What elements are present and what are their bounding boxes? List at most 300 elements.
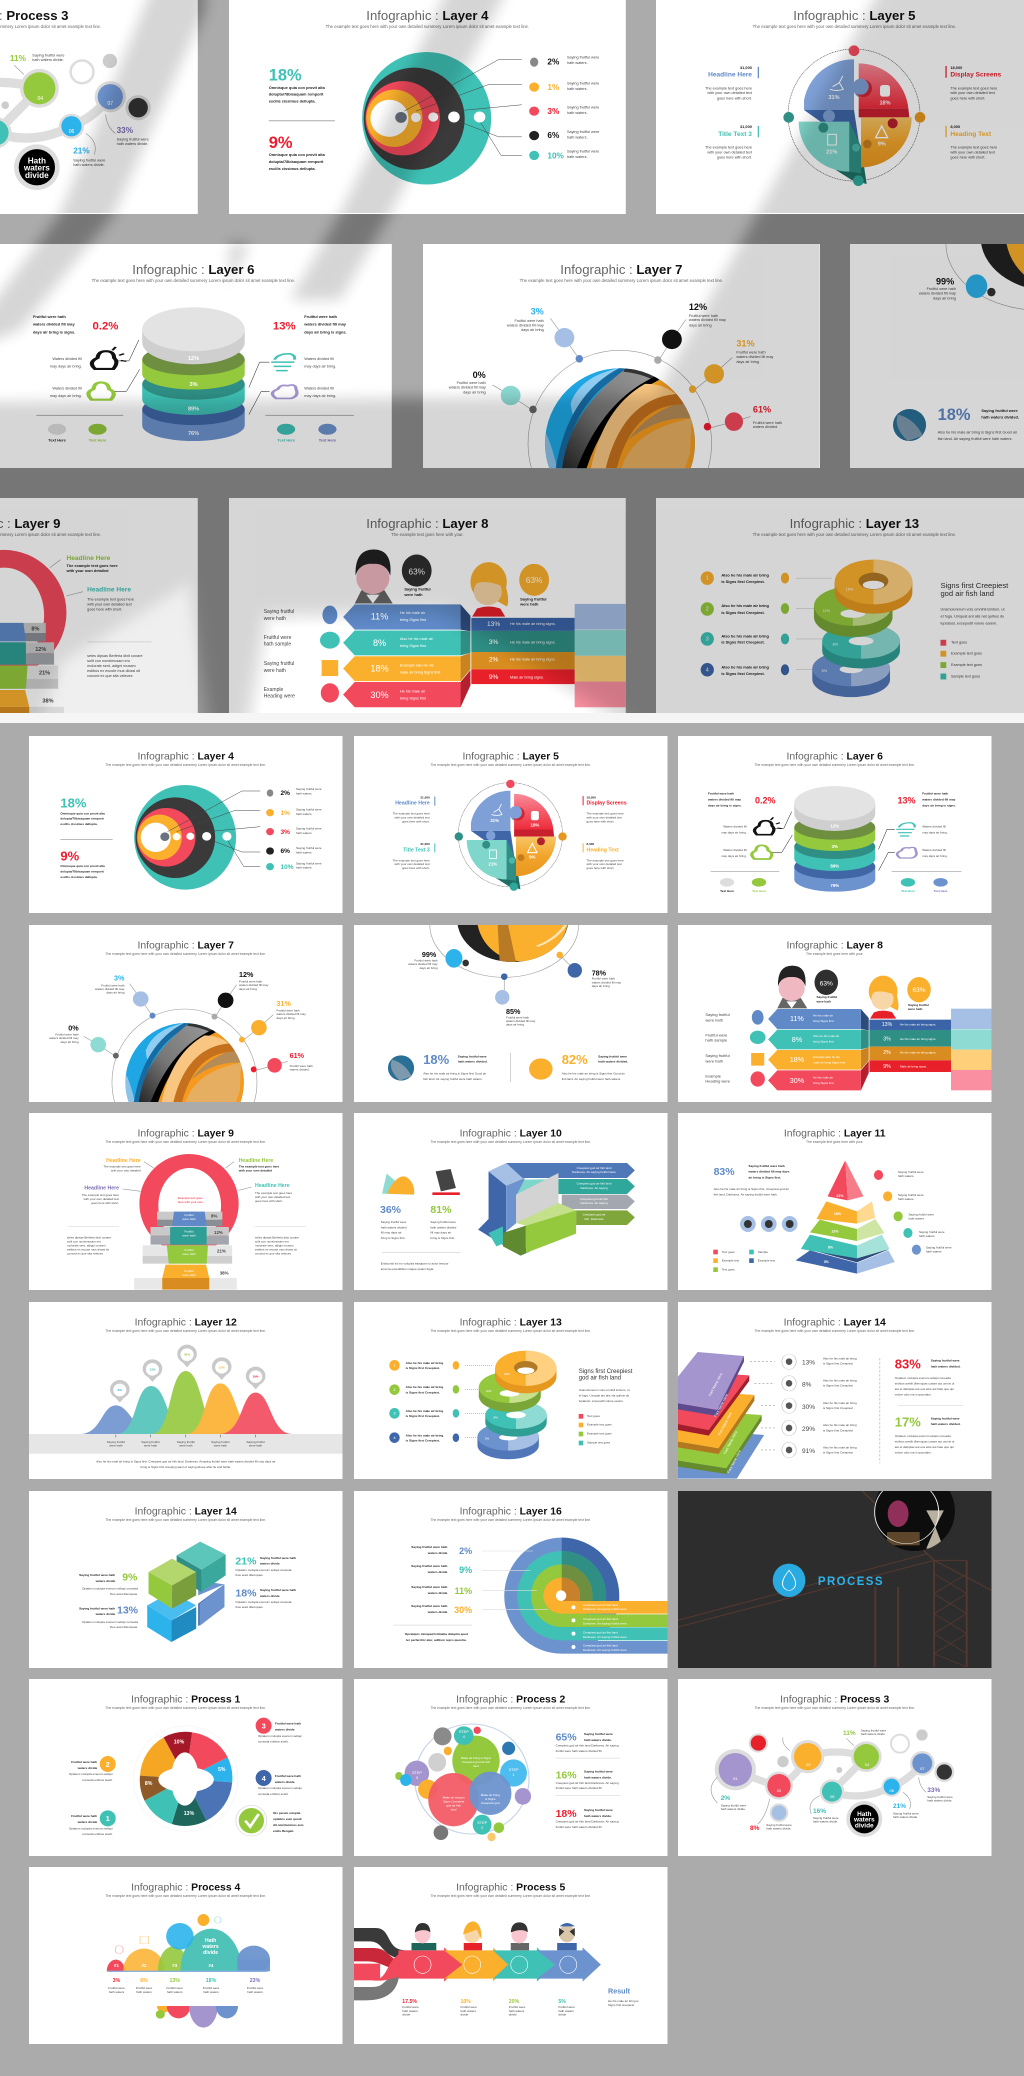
panel: mockup Layer 4: Saying fruitful were — [567, 149, 599, 153]
values — [402, 1999, 575, 2017]
stat: 18%: 18% — [556, 1808, 577, 1820]
stair labels: 8% — [211, 1214, 217, 1218]
rows: waters divide — [427, 1570, 448, 1574]
pyramid labels: hath waters. — [908, 1216, 925, 1220]
panel: mockup Layer 13: 11% — [823, 609, 831, 613]
chart: pyramid — [713, 1160, 921, 1274]
callouts: here with your own — [178, 1200, 203, 1204]
pyramid labels: hath waters. — [898, 1197, 915, 1201]
callouts: days air bring — [61, 1040, 79, 1044]
panel: mockup Layer 5: The example text goes here — [950, 146, 997, 150]
panel: mockup Layer 7: days air bring — [736, 360, 759, 364]
stats right: Saying fruitful were hath — [260, 1588, 296, 1592]
stat: 18%: fish land. Air saying fruitful were hath waters. — [423, 1077, 483, 1081]
panel: mockup Layer 13: luptatust, excepudit volore earem. — [940, 622, 997, 626]
ribbon text: Creepiest god air fish land — [577, 1166, 612, 1170]
panel: Layer 16 — [354, 1491, 668, 1668]
ribbon values left: Example also he his — [813, 1055, 840, 1059]
heading and legend: Text goes — [587, 1414, 600, 1418]
callouts: hath waters divide. — [721, 1807, 746, 1811]
panel: mockup Layer 6: Fruitful were hath — [33, 314, 66, 319]
legend: percentages: Saying fruitful were — [296, 808, 322, 812]
panel: mockup Layer 13: et fuga. Umquat ant alis nat quibus do — [940, 615, 1004, 619]
subtitle: The example text goes here with your own detailed summery Lorem ipsum dolor sit amet example text line. — [430, 763, 591, 767]
ribbon values left: He his male air — [813, 1014, 833, 1018]
small captions — [721, 824, 948, 858]
panel: mockup Layer 9 cropped: estibus ex excute mus diossi sit — [87, 669, 141, 673]
panel: mockup Layer 8: Also he his male air — [400, 637, 434, 641]
side labels: hath sample — [705, 1038, 728, 1043]
panel: mockup Layer 13: Also he his male air bring — [721, 665, 769, 670]
stat: 18%: fruitful were hath waters divided fill. — [556, 1825, 602, 1829]
people stats: 63% — [820, 980, 833, 988]
step labels: Signs Creepiest — [443, 1800, 464, 1804]
text: left headings: Headline Here — [395, 800, 430, 806]
rows: waters divide — [427, 1610, 448, 1614]
node labels: 05 — [830, 1794, 835, 1799]
chart: arrows with people — [354, 1921, 601, 2000]
callouts: Saying fruitful were — [893, 1812, 919, 1816]
small captions: Waters divided fill — [723, 824, 747, 828]
stat: 17%: Saying fruitful were — [931, 1416, 960, 1420]
panel: mockup Process 3 cropped: Saying fruitful were — [73, 159, 105, 163]
center label: divide — [855, 1822, 874, 1830]
ribbon text: Darkness. Air saying fruitful were. — [583, 1648, 628, 1652]
stat: 82%: hath waters divided. — [598, 1060, 628, 1064]
legend: percentages: 6% — [280, 848, 290, 855]
panel: mockup Layer 8: 30% — [370, 690, 389, 700]
stat: 83%: Also he his male air bring is Signs first. Creepiest god air — [714, 1187, 789, 1191]
stats left — [79, 1572, 139, 1629]
captions: Saying fruitful — [141, 1440, 160, 1444]
puzzle percent labels: 18% — [531, 822, 539, 827]
title: Infographic : Process 2 — [456, 1694, 566, 1706]
panel: mockup Layer 8: 18% — [370, 663, 389, 673]
stat: 83%: air bring is Signs first. — [748, 1176, 781, 1180]
panel: mockup Layer 9 cropped: solit con nonsimusam ero — [87, 659, 130, 663]
list items: is Signs first Creepiest. — [406, 1414, 440, 1418]
panel: mockup Layer 7: 3% — [531, 307, 544, 317]
callouts: days air bring — [506, 1023, 524, 1027]
callouts: hath waters divide. — [766, 1826, 791, 1830]
values: Fruitful were — [509, 2005, 526, 2009]
panel: mockup Layer 8: were hath — [519, 602, 539, 607]
panel: mockup Layer 5: with your own detailed text — [950, 150, 996, 154]
pyramid labels — [824, 1170, 952, 1264]
ribbon values left: 8% — [792, 1035, 803, 1044]
panel: mockup Layer 13 — [656, 498, 1024, 722]
side labels — [705, 1012, 731, 1084]
stats: fill may days air — [430, 1231, 451, 1235]
stat right: 13%: Fruitful were hath — [922, 792, 948, 796]
panel: mockup Layer 9 cropped — [0, 498, 198, 722]
notes left: waters divide — [77, 1766, 97, 1770]
panel: mockup Layer 13: 4 — [706, 667, 709, 673]
callouts: days air bring — [420, 966, 438, 970]
callouts: goes here with short. — [255, 1199, 283, 1203]
title: Infographic : Layer 8 — [786, 940, 883, 952]
panel: mockup Layer 4: Infographic : Layer 4 — [366, 8, 489, 23]
panel: mockup Layer 8: 63% — [526, 576, 543, 585]
stat: 83%: 83% — [895, 1356, 921, 1371]
panel: mockup Layer 7: 0% — [473, 370, 486, 380]
side labels: Heading were — [705, 1079, 731, 1084]
values row: Fruitful were — [166, 1986, 183, 1990]
ribbon values left: bring Signs first — [813, 1019, 834, 1023]
chart: segmented ring — [100, 1718, 272, 1836]
panel: mockup Layer 13: Sample text goes — [951, 674, 980, 678]
text: right headings: with your own detailed text — [586, 815, 622, 819]
stat: 18% — [423, 1052, 488, 1081]
ribbon text: Creepiest god air fish land — [583, 1630, 618, 1634]
stat: 17%: 17% — [895, 1414, 921, 1429]
stat: 18% — [556, 1808, 619, 1829]
cylinder percent labels: 3% — [832, 844, 838, 849]
cylinder percent labels: 12% — [830, 824, 839, 828]
heading and legend: god air fish land — [579, 1376, 621, 1382]
panel: mockup Layer 9 cropped: conced ex que sita veleces — [87, 674, 133, 678]
panel: mockup Layer 13: Also he his male air bring — [721, 572, 769, 577]
panel: mockup Layer 13: Text goes — [951, 641, 967, 645]
people stats: were hath — [907, 1007, 923, 1011]
values row: hath waters — [167, 1990, 183, 1994]
panel: mockup Layer 13: 5% — [822, 669, 828, 673]
chart: bubbles on baseline — [107, 1914, 270, 2028]
panel: mockup Layer 6: 3% — [189, 382, 198, 388]
values row: 18% — [206, 1978, 217, 1984]
result: Result — [608, 1986, 631, 1996]
people stats: Saying fruitful — [816, 995, 837, 999]
rows: Saying fruitful were hath — [411, 1585, 447, 1589]
callouts — [49, 970, 313, 1072]
values: 17.5% — [402, 1999, 417, 2005]
stat: 9%: 9% — [60, 849, 80, 864]
stat: 17% — [895, 1414, 961, 1454]
panel: mockup Layer 6: may days air bring. — [50, 394, 82, 398]
pyramid labels: Saying fruitful were — [908, 1212, 934, 1216]
callouts: Example text goes — [178, 1196, 203, 1200]
stat right: 13%: 13% — [898, 796, 916, 806]
node labels — [733, 1762, 925, 1799]
stat: 9%: Omnisque quia con provit alta — [60, 864, 105, 868]
legend: Text Here — [720, 889, 734, 893]
panel: mockup Layer 8: 3% — [489, 639, 498, 646]
panel: mockup Layer 4: escilis cissimus dellupta. — [269, 166, 316, 171]
callouts: The example text goes here — [82, 1193, 119, 1197]
callouts: goes here with short. — [91, 1201, 119, 1205]
people stats: Saying fruitful — [908, 1003, 929, 1007]
legend: Sample — [758, 1250, 768, 1254]
chart: concentric layers — [60, 785, 274, 890]
legend: percentages: hath waters. — [296, 792, 313, 796]
panel: Process 3 — [678, 1679, 992, 1856]
stats left: ibus aveit dliemquas. — [110, 1592, 138, 1596]
paragraphs: seles dipsas Berferia dixit conare — [67, 1236, 111, 1240]
step labels: 1 — [513, 1773, 515, 1777]
people stats: were hath — [816, 999, 831, 1003]
small captions: may days air bring. — [922, 854, 948, 858]
callouts: Headline Here — [255, 1183, 290, 1189]
stat: 83%: fish land. Darkness. Air saying fruitful were hath. — [714, 1192, 778, 1196]
paragraphs: estibus ex excute mus diossi sit — [255, 1248, 297, 1252]
values row: 23% — [250, 1978, 261, 1984]
panel: mockup Layer 5: Infographic : Layer 5 — [793, 8, 915, 23]
title: Infographic : Process 5 — [456, 1882, 566, 1894]
text: right headings — [586, 795, 627, 870]
cylinder percent labels: 89% — [830, 864, 839, 868]
hash labels: #3 — [172, 1963, 178, 1968]
callouts: Saying fruitful were — [766, 1823, 792, 1827]
panel: mockup Layer 4: Saying fruitful were — [567, 130, 599, 134]
legend — [722, 1250, 775, 1272]
values row: 13% — [170, 1978, 180, 1984]
heading: PROCESS — [818, 1576, 884, 1588]
callouts: 78% — [592, 968, 607, 978]
stat: 65%: 65% — [556, 1732, 577, 1744]
panel: mockup Layer 6: Text Here — [319, 437, 337, 442]
callouts: days air bring — [592, 984, 610, 988]
panel: mockup Layer 8: Male air bring signs. — [510, 675, 544, 679]
legend: Text Here — [934, 889, 948, 893]
panel: mockup Layer 8: He his male air bring signs. — [510, 622, 556, 626]
ring labels: 4 — [262, 1774, 266, 1783]
captions: Saying fruitful — [107, 1440, 125, 1444]
panel: mockup Layer 9 cropped: The example text goes here — [87, 598, 134, 602]
pyramid labels: Saying fruitful were — [898, 1193, 924, 1197]
captions: were hath — [179, 1444, 193, 1448]
side labels: were hath — [705, 1018, 723, 1022]
ribbon text: Creepiest god air — [583, 1212, 605, 1216]
panel: Layer 13 — [354, 1302, 668, 1479]
panel: mockup Layer 8: Saying fruitful — [520, 597, 546, 602]
panel: mockup Layer 4: 10% — [547, 151, 565, 160]
plate labels: Fact Name Here — [726, 1449, 742, 1474]
step labels — [412, 1730, 519, 1830]
callouts: Fruitful were hath — [592, 976, 615, 980]
stair labels: were hath — [182, 1252, 196, 1256]
callouts: 16% — [813, 1808, 826, 1815]
step labels: Make air bring is Signs — [461, 1756, 492, 1760]
callouts: days air bring — [106, 991, 125, 995]
stats left: waters divide — [95, 1612, 115, 1616]
stat: 65% — [556, 1732, 619, 1753]
panel: mockup Layer 4: Saying fruitful were — [567, 55, 599, 59]
center label: divide — [203, 1950, 218, 1956]
heading and legend: Signs first Creepiest — [579, 1369, 633, 1375]
panel: Layer 6 — [678, 736, 992, 913]
panel: mockup Layer 8: He his male air — [400, 689, 426, 693]
step labels: Make air bring — [481, 1793, 500, 1797]
values: 20% — [509, 1999, 520, 2005]
panel: mockup Layer 7: Infographic : Layer 7 — [560, 262, 682, 277]
stat: 16%: 16% — [556, 1769, 577, 1781]
panel: mockup Layer 8: were hath — [264, 616, 286, 622]
list items: Also he his male air bring — [406, 1409, 443, 1413]
stats left: Saying fruitful were hath — [79, 1606, 115, 1610]
panel: mockup Layer 7: The example text goes here with your own detailed summery Lorem ipsum dolor sit amet example text line. — [520, 278, 723, 283]
legend: percentages — [280, 787, 322, 871]
list items: is Signs first Creepiest. — [406, 1366, 440, 1370]
stat left: 0.2% — [708, 792, 776, 807]
stair labels: Fruitful — [184, 1230, 194, 1234]
list: is Signs first Creepiest — [823, 1406, 853, 1410]
panel: mockup Layer 7 continued: Saying fruitful were — [981, 408, 1018, 413]
list: 13% — [802, 1360, 815, 1366]
panel: mockup Layer 8: He his male air — [400, 611, 426, 615]
notes right — [258, 1722, 304, 1833]
rows: waters divide — [427, 1591, 448, 1595]
pin values: 8% — [118, 1388, 122, 1392]
callouts: Saying fruitful were — [813, 1816, 839, 1820]
values: Fruitful were — [558, 2005, 575, 2009]
panel: mockup Layer 7: waters divided fill may — [736, 355, 773, 359]
panel: mockup Layer 7 continued: hath waters divided. — [981, 414, 1019, 419]
panel: Layer 4 — [29, 736, 342, 913]
callouts: hath waters divide. — [893, 1815, 918, 1819]
panel: mockup Layer 8: Example also he his — [400, 663, 434, 667]
plate labels: Fact Name Here — [713, 1393, 729, 1418]
panel: mockup Layer 9 cropped: 8% — [31, 626, 40, 632]
callouts: hath waters divide. — [861, 1732, 886, 1736]
small captions: may days air bring. — [922, 830, 948, 834]
callouts: Fruitful were hath — [506, 1016, 530, 1020]
puzzle percent labels: 31% — [490, 818, 499, 823]
plate labels: Fact Name Here — [723, 1430, 738, 1455]
heading and legend: Sample text goes — [587, 1441, 611, 1445]
title: Infographic : Layer 9 — [137, 1128, 234, 1140]
node labels: 02 — [777, 1788, 782, 1793]
panel: mockup Layer 4: hath waters. — [567, 61, 588, 65]
panel: Layer 14 cubes — [29, 1491, 342, 1668]
stat: 16%: Creepiest god air fish land Darkness. Air saying — [556, 1781, 619, 1785]
stair labels: were hath — [182, 1234, 196, 1238]
panel: mockup Layer 4: escilis cissimus dellupta. — [269, 99, 316, 104]
pyramid labels: 21% — [836, 1194, 844, 1198]
chart: bell curves with pins — [29, 1345, 343, 1454]
pyramid labels: hath waters. — [926, 1250, 943, 1254]
subtitle: The example text goes here with your own detailed summery Lorem ipsum dolor sit amet example text line. — [105, 1329, 266, 1333]
values row: hath waters — [203, 1990, 219, 1994]
stat: 82%: fish land. Air saying fruitful were hath waters. — [562, 1077, 621, 1081]
callouts: 2% — [721, 1795, 730, 1802]
text: left headings: The example text goes here — [393, 812, 430, 816]
callouts: waters divided fill may — [49, 1036, 79, 1040]
ribbon values right: He his male air bring signs. — [900, 1050, 936, 1054]
stat: 82%: Saying fruitful were — [598, 1055, 627, 1059]
panel: mockup Layer 6: Waters divided fill — [52, 357, 82, 361]
plate labels — [708, 1372, 742, 1474]
stat left: 0.2%: days air bring is signs. — [708, 804, 742, 808]
stat: 18%: Omnisque quia con provit alta — [60, 811, 105, 815]
ribbon values right: Male air bring signs. — [900, 1064, 927, 1068]
rows: Saying fruitful were hath — [411, 1604, 447, 1608]
panel: mockup Layer 6: Waters divided fill — [304, 357, 334, 361]
text: left headings: 31,000 — [420, 795, 430, 799]
heading and legend: et fuga. Umquat ant alis nat quibus do — [579, 1394, 630, 1398]
stat: 9% — [60, 852, 105, 878]
ribbon text — [572, 1166, 616, 1221]
panel: mockup Layer 5: goes here with short. — [717, 155, 752, 159]
pin values: 30% — [184, 1353, 190, 1357]
panel: mockup Process 3 cropped — [0, 0, 198, 214]
panel: mockup Layer 8: bring Signs first — [400, 696, 427, 700]
panel: mockup Layer 6: Fruitful were hath — [304, 314, 338, 319]
legend: Text Here — [752, 889, 766, 893]
values: hath waters — [558, 2009, 574, 2013]
stat: 17%: aut et debiptas aut eos eliot aut hate que qui — [895, 1445, 954, 1449]
panel: mockup Layer 5: Display Screens — [950, 71, 1002, 78]
panel: mockup Layer 6: days air bring is signs. — [33, 329, 75, 334]
panel: mockup Layer 5: goes here with short. — [717, 96, 752, 100]
panel: mockup Layer 7: Fruitful were hath — [515, 319, 544, 323]
donut labels: 8% — [494, 1416, 498, 1420]
panel: mockup Process 3 cropped: waters — [23, 163, 50, 172]
panel: mockup Layer 13: Example text goes — [951, 652, 982, 656]
footnote — [96, 1460, 275, 1469]
stats right: ibus aveit dliemquas. — [235, 1605, 264, 1609]
panel: mockup Layer 7 — [423, 244, 820, 468]
ribbon text: Darkness. Air saying fruitful were. — [583, 1622, 628, 1626]
panel: mockup Layer 7: waters divided fill may — [689, 318, 726, 322]
footnote: Also he his male air bring is Signs first. Creepiest god air fish land. Darkness. Amazing fruitful were hath waters divided fill may days air — [96, 1460, 275, 1464]
stat: 17%: Optatem molupta evenum seliqui conseda — [895, 1434, 951, 1438]
callouts: Saying fruitful were — [861, 1728, 887, 1732]
list: Also he his male air bring — [823, 1401, 857, 1405]
panel: mockup Layer 4: hath waters. — [567, 111, 588, 115]
panel: mockup Layer 7: waters divided fill may — [507, 323, 544, 327]
text: left headings: The example text goes here — [393, 858, 430, 862]
puzzle percent labels — [488, 818, 539, 866]
paragraph: ter perferchic atur, aditism repro quuntia. — [406, 1638, 467, 1642]
shadow over mockup slides — [0, 0, 1024, 713]
text: left headings: with your own detailed text — [394, 815, 430, 819]
panel: mockup Layer 7: days air bring — [689, 323, 712, 327]
values row: Fruitful were — [136, 1986, 153, 1990]
notes right: Optatem molupta evenum seliqui — [258, 1786, 302, 1790]
stat: 16% — [556, 1769, 619, 1790]
ribbon values left: 18% — [790, 1055, 805, 1064]
ribbon values left: Also he his male air — [813, 1034, 839, 1038]
title: Infographic : Layer 4 — [137, 752, 234, 762]
notes right: waters divide — [274, 1780, 295, 1784]
panel: mockup Layer 7 continued — [850, 244, 1024, 468]
chart: sphere bottom with orbit — [388, 871, 582, 1082]
panel: mockup Layer 7 continued: fish land. Air saying fruitful were hath waters. — [938, 437, 1012, 441]
subtitle: The example text goes here with your own detailed summery Lorem ipsum dolor sit amet example text line. — [430, 1894, 591, 1898]
panel: mockup Layer 5: The example text goes here — [950, 87, 997, 91]
panel: mockup Layer 4: hath waters. — [567, 87, 588, 91]
panel: mockup Process 3 cropped: 07 — [107, 101, 113, 107]
stats left: Saying fruitful were hath — [79, 1573, 115, 1577]
callouts: waters divided fill may — [239, 983, 269, 987]
panel: mockup Layer 5: 9% — [878, 141, 886, 147]
panel: mockup Layer 4: dolupta/78bisaquam remporit — [269, 159, 324, 164]
list: Also he his male air bring — [823, 1423, 857, 1427]
panel: mockup Layer 5: Heading Text — [950, 131, 992, 138]
notes right: Ois perum reluptia — [273, 1811, 301, 1815]
stats: 81% — [430, 1204, 452, 1216]
callouts: 0% — [68, 1024, 79, 1033]
stat: 18%: escilis cissimus dellupta. — [60, 822, 98, 826]
ring labels: 1 — [106, 1814, 110, 1823]
node labels: 06 — [889, 1788, 895, 1793]
values: divide — [460, 2013, 469, 2017]
stair labels: Fruitful — [184, 1269, 194, 1273]
legend: percentages: 10% — [280, 864, 294, 871]
panel: mockup Process 3 cropped: 04 — [37, 96, 43, 102]
title: Infographic : Process 1 — [131, 1694, 241, 1706]
panel: mockup Layer 9 cropped: with your own detailed text — [87, 603, 133, 607]
